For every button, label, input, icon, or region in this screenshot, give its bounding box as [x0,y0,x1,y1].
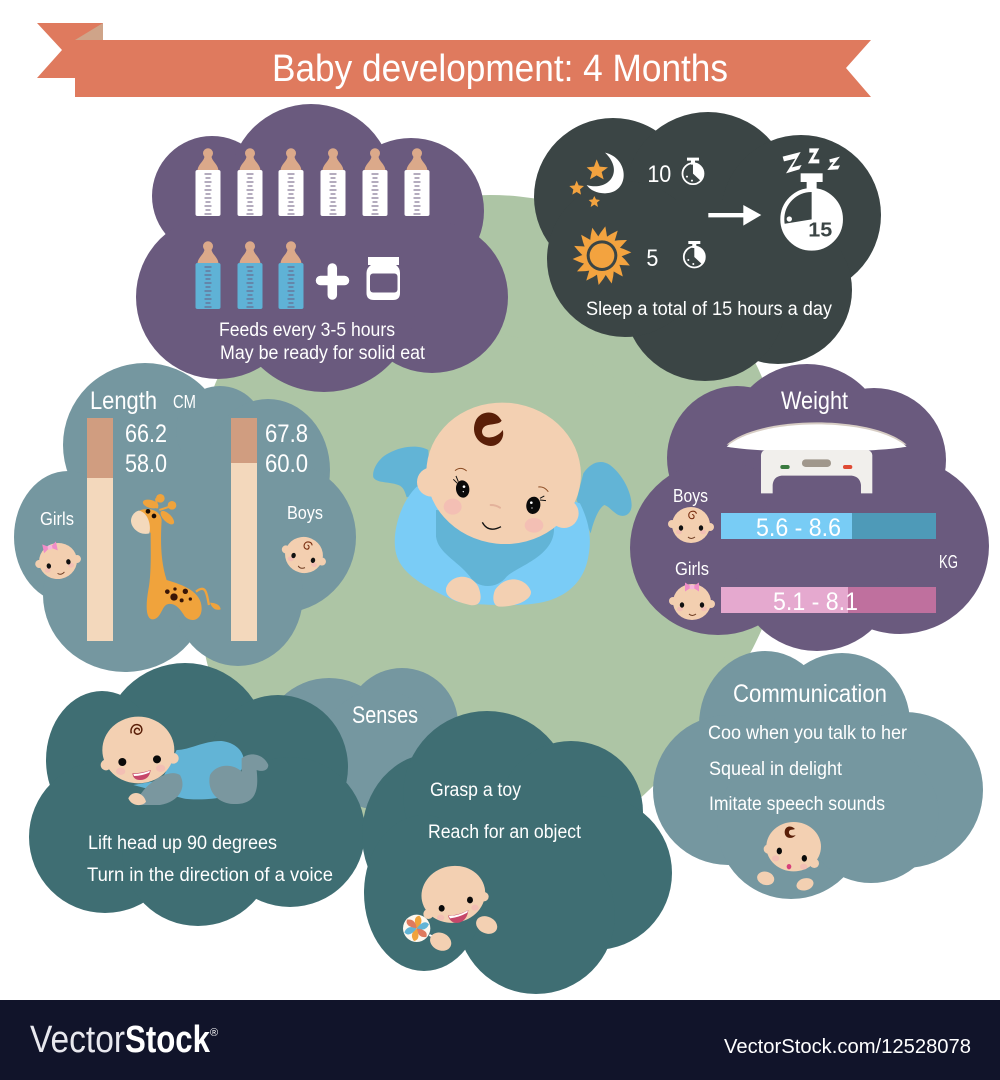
label: girls: Girls [40,509,74,529]
bar: boys length [231,418,257,641]
icon: talking baby [756,822,821,892]
heading: senses: Senses [352,702,418,729]
text: feeding [219,320,426,364]
icon: boy face [277,532,331,578]
green background blob [192,195,788,864]
bar: boys weight [721,513,936,542]
illustration: baby with lollipop [403,860,500,954]
icon: sun [572,226,632,285]
heading: weight: Weight [781,387,848,415]
icon: white milk bottles [196,148,430,216]
logo: VectorStock: ® [210,1027,218,1039]
panel: feeding [136,104,508,392]
icon: girl face [31,537,84,583]
text: motor skills: Lift head up 90 degrees [88,833,277,854]
panel: motor skills [29,663,365,926]
sleep hours 5: 5 [646,245,658,272]
values: girls [125,420,167,478]
panel: senses back cloud [262,668,458,812]
label: girls: Girls [675,559,709,579]
panel: communication [653,651,983,899]
values: boys [265,420,308,478]
unit: kg: KG [939,552,958,572]
illustration: baby lifting head [101,717,268,805]
icon: baby scale [727,422,907,493]
panel: senses [362,711,672,994]
bar: girls length [87,418,113,641]
label: boys: Boys [673,486,708,506]
values: boys: 67.8 [265,420,308,448]
icon: girl face [669,582,715,620]
icon: plus [320,268,344,295]
logo: VectorStock: Vector [30,1019,125,1061]
icon: arrow [708,205,761,226]
icon: stopwatch 10 [682,158,703,184]
panel: length [14,363,356,672]
icon: stopwatch 5 [684,241,705,267]
text: communication [708,723,908,815]
panel: weight [630,364,989,651]
bar: girls weight [721,587,936,616]
bar: boys weight: 5.6 - 8.6 [756,514,841,542]
icon: boy face [668,507,714,543]
heading: length: Length [90,387,157,415]
title: Baby development: 4 Months [272,48,728,90]
footer bar [0,1000,1000,1080]
label: boys: Boys [287,503,323,523]
panel: sleep [534,112,881,381]
footer url: VectorStock.com/12528078 [724,1036,971,1058]
logo: VectorStock: Stock [125,1019,211,1061]
icon: big stopwatch with zzz [781,148,842,250]
icon: big stopwatch with zzz: 15 [808,219,832,242]
values: girls: 66.2 [125,420,167,448]
icon: food jar [366,257,400,300]
unit: cm: CM [173,392,196,412]
icon: moon and stars [569,153,624,207]
text: motor skills: Turn in the direction of a voice [87,865,333,886]
illustration: central baby [373,395,632,607]
logo: VectorStock [30,1019,218,1061]
values: girls: 58.0 [125,450,167,478]
text: communication: Imitate speech sounds [709,794,885,815]
text: communication: Squeal in delight [709,759,843,780]
text: communication: Coo when you talk to her [708,723,908,744]
icon: blue bottles [196,241,304,309]
bar: girls weight: 5.1 - 8.1 [773,588,858,616]
text: senses: Grasp a toy [430,780,521,801]
text: motor skills [87,833,333,886]
values: boys: 60.0 [265,450,308,478]
text: sleep: Sleep a total of 15 hours a day [586,299,832,320]
text: senses: Reach for an object [428,822,582,843]
text: feeding: May be ready for solid eat [220,343,426,364]
icon: giraffe [131,494,221,620]
text: feeding: Feeds every 3-5 hours [219,320,395,341]
text: senses [428,780,582,843]
heading: communication: Communication [733,680,887,708]
sleep hours 10: 10 [647,161,671,188]
title ribbon [37,23,871,97]
